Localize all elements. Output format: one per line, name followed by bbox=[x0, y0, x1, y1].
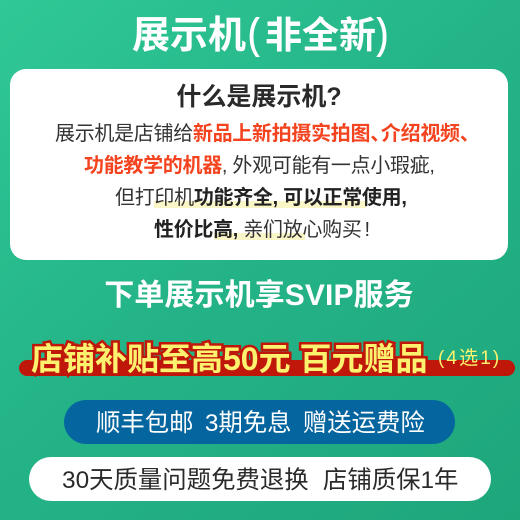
white pill text: 30天质量问题免费退换 店铺质保1年 bbox=[62, 467, 458, 494]
red banner bbox=[19, 360, 515, 376]
blue pill bbox=[64, 400, 455, 444]
banner text: 店铺补贴至高50元 百元赠品 bbox=[31, 341, 428, 377]
banner note: (4选1) bbox=[438, 348, 501, 369]
panel: what is a display unit bbox=[10, 69, 508, 260]
text line 3: 但打印机功能齐全, 可以正常使用, bbox=[115, 187, 407, 209]
title bbox=[132, 10, 388, 57]
text line 1: 展示机是店铺给新品上新拍摄实拍图、介绍视频、 bbox=[55, 123, 470, 145]
text line 4: 性价比高, 亲们放心购买! bbox=[154, 219, 370, 241]
highlight: line four bbox=[214, 233, 305, 240]
title: ) bbox=[377, 10, 388, 57]
panel heading: 什么是展示机? bbox=[176, 83, 342, 111]
title: 展示机 bbox=[132, 15, 246, 57]
highlight: line three bbox=[154, 201, 366, 208]
blue pill text: 顺丰包邮 3期免息 赠送运费险 bbox=[96, 410, 425, 437]
title: ( bbox=[248, 10, 259, 57]
white pill bbox=[29, 457, 491, 501]
service heading: 下单展示机享SVIP服务 bbox=[104, 279, 414, 312]
text line 2: 功能教学的机器, 外观可能有一点小瑕疵, bbox=[84, 155, 435, 177]
title: 非全新 bbox=[265, 15, 376, 56]
